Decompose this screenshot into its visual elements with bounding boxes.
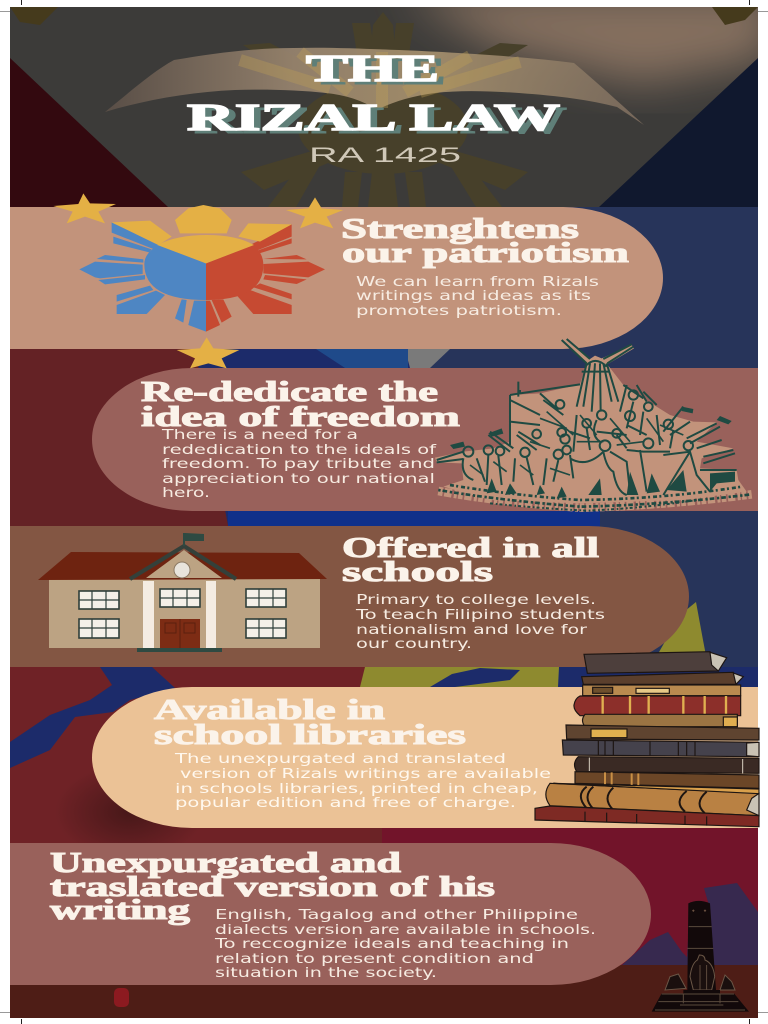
subtitle: RA 1425 bbox=[309, 144, 461, 167]
title bbox=[187, 48, 567, 142]
text: patriotism body: promotes patriotism. bbox=[356, 303, 562, 319]
icon: star bottom bbox=[177, 337, 239, 368]
title: THE bbox=[306, 48, 439, 90]
open book bbox=[105, 48, 644, 125]
heading: offered: schools bbox=[342, 557, 493, 588]
heading: strengthens: our patriotism bbox=[342, 238, 629, 269]
text: libraries body: popular edition and free of charge. bbox=[175, 795, 516, 811]
panel: strengthens our patriotism bbox=[10, 207, 663, 349]
text: freedom body: hero. bbox=[162, 485, 210, 501]
text: libraries body: The unexpurgated and translated bbox=[174, 751, 506, 767]
panel: re-dedicate the idea of freedom bbox=[92, 368, 758, 511]
text: schools body: our country. bbox=[356, 636, 472, 652]
text: schools body: To teach Filipino students bbox=[355, 607, 605, 623]
heading: libraries: school libraries bbox=[154, 720, 466, 751]
text: unexpurgated body: To reccognize ideals and teaching in bbox=[214, 936, 569, 952]
text: schools body: nationalism and love for bbox=[356, 622, 588, 638]
icon: star left bbox=[53, 193, 116, 223]
heading: unexpurgated: traslated version of his bbox=[50, 872, 495, 903]
icon: school building bbox=[38, 533, 327, 652]
icon: stack of books bbox=[535, 652, 759, 827]
text: libraries body: version of Rizals writings are available bbox=[180, 766, 551, 782]
title: RIZAL LAW bbox=[194, 100, 567, 142]
heading: strengthens: Strenghtens bbox=[341, 214, 579, 245]
text: schools body: Primary to college levels. bbox=[356, 592, 596, 608]
icon: rizal monument silhouette bbox=[652, 901, 749, 1012]
heading: offered: Offered in all bbox=[342, 533, 599, 564]
icon: philippine sun bbox=[79, 205, 325, 332]
text: unexpurgated body: English, Tagalog and other Philippine bbox=[215, 907, 578, 923]
icon: star right bbox=[286, 197, 343, 228]
text: freedom body: There is a need for a bbox=[161, 427, 358, 443]
heading: libraries: Available in bbox=[154, 695, 386, 726]
title: THE bbox=[312, 51, 446, 93]
icon: rizal monument illustration bbox=[435, 339, 752, 511]
heading: re-dedicate: idea of freedom bbox=[141, 402, 460, 433]
text: freedom body: appreciation to our national bbox=[162, 471, 435, 487]
text: unexpurgated body: dialects version are available in schools. bbox=[215, 922, 596, 938]
panel: unexpurgated and translated version bbox=[10, 843, 651, 985]
heading: unexpurgated: writing bbox=[50, 895, 190, 926]
title: RIZAL LAW bbox=[187, 97, 560, 139]
text: freedom body: freedom. To pay tribute and bbox=[162, 456, 435, 472]
heading: re-dedicate: Re-dedicate the bbox=[141, 377, 438, 408]
panel: offered in all schools bbox=[10, 526, 689, 667]
heading: unexpurgated: Unexpurgated and bbox=[50, 848, 402, 879]
text: unexpurgated body: relation to present condition and bbox=[215, 951, 534, 967]
panel: available in school libraries bbox=[92, 687, 758, 828]
text: libraries body: in schools libraries, printed in cheap, bbox=[175, 781, 538, 797]
text: patriotism body: writings and ideas as its bbox=[356, 288, 591, 304]
text: unexpurgated body: situation in the society. bbox=[215, 965, 437, 981]
text: freedom body: rededication to the ideals of bbox=[162, 442, 438, 458]
text: patriotism body: We can learn from Rizals bbox=[356, 274, 599, 290]
faint sun behind title bbox=[241, 12, 528, 207]
